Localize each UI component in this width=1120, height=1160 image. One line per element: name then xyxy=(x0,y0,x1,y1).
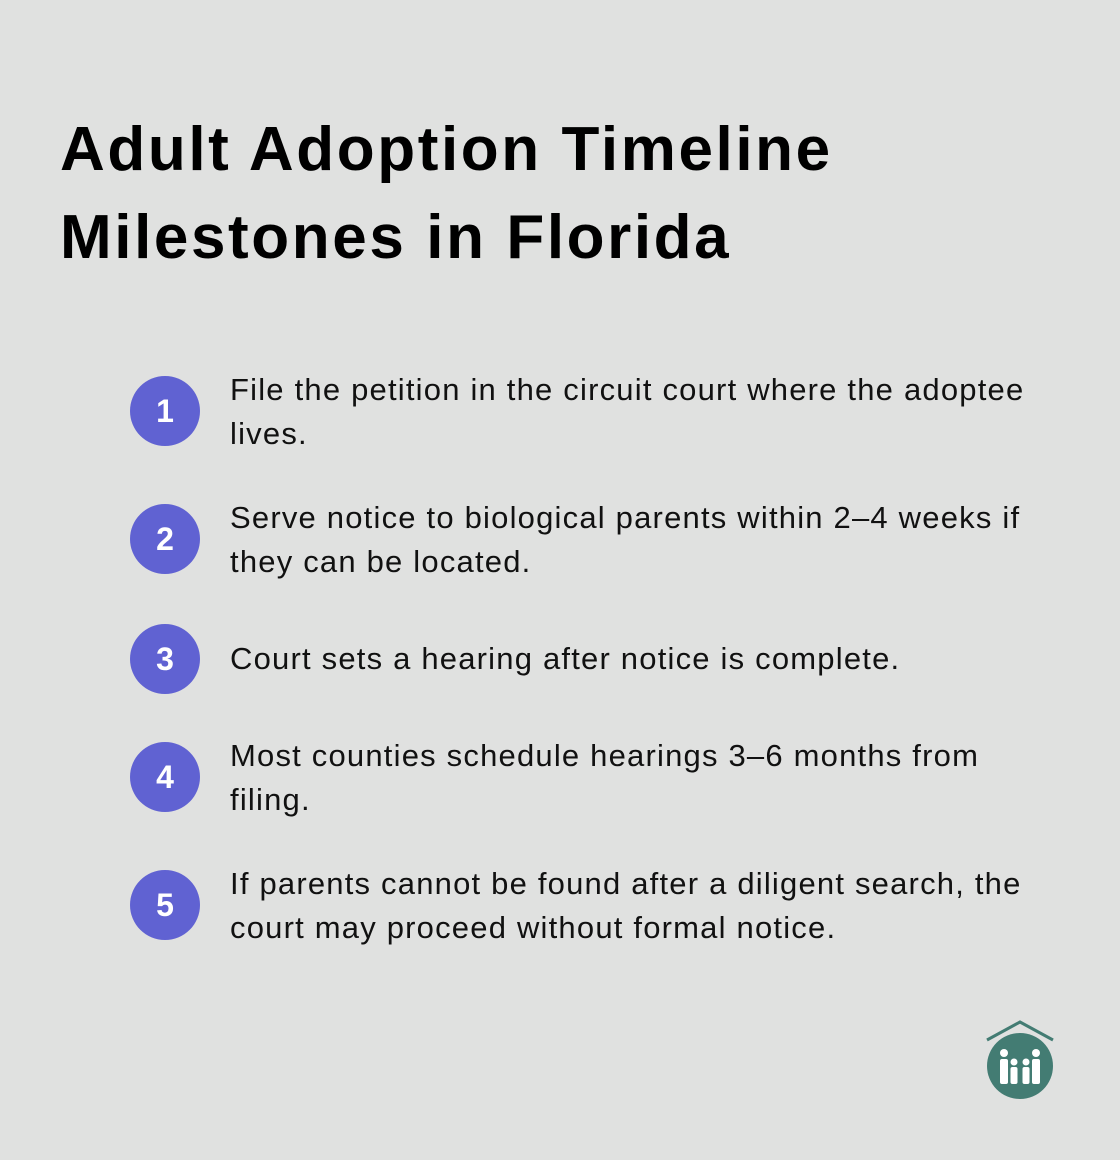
number badge 1 xyxy=(130,376,200,446)
number badge 4 xyxy=(130,742,200,812)
number badge 1: 1 xyxy=(156,393,174,429)
step 5 text xyxy=(230,866,1022,945)
number badge 5: 5 xyxy=(156,887,174,923)
number badge 2: 2 xyxy=(156,521,174,557)
step 3 text: Court sets a hearing after notice is complete. xyxy=(230,641,900,676)
logo: family house xyxy=(986,1020,1054,1099)
number badge 5 xyxy=(130,870,200,940)
step 4 text xyxy=(230,738,979,817)
step 1 text: File the petition in the circuit court where the adoptee xyxy=(230,372,1024,407)
step 2 text: they can be located. xyxy=(230,544,531,579)
step 4 xyxy=(130,738,979,817)
number badge 3: 3 xyxy=(156,641,174,677)
number badge 4: 4 xyxy=(156,759,174,795)
step 2 text: Serve notice to biological parents within 2–4 weeks if xyxy=(230,500,1020,535)
step 5 xyxy=(130,866,1022,945)
step 5 text: court may proceed without formal notice. xyxy=(230,910,836,945)
step 5 text: If parents cannot be found after a diligent search, the xyxy=(230,866,1022,901)
step 3 xyxy=(130,624,900,694)
step 4 text: filing. xyxy=(230,782,311,817)
step 1 text xyxy=(230,372,1024,451)
title xyxy=(60,115,833,272)
step 1 text: lives. xyxy=(230,416,308,451)
title: Adult Adoption Timeline xyxy=(60,115,833,184)
number badge 3 xyxy=(130,624,200,694)
step 2 text xyxy=(230,500,1020,579)
step 2 xyxy=(130,500,1020,579)
number badge 2 xyxy=(130,504,200,574)
step 1 xyxy=(130,372,1024,451)
step 4 text: Most counties schedule hearings 3–6 months from xyxy=(230,738,979,773)
title: Milestones in Florida xyxy=(60,203,731,272)
